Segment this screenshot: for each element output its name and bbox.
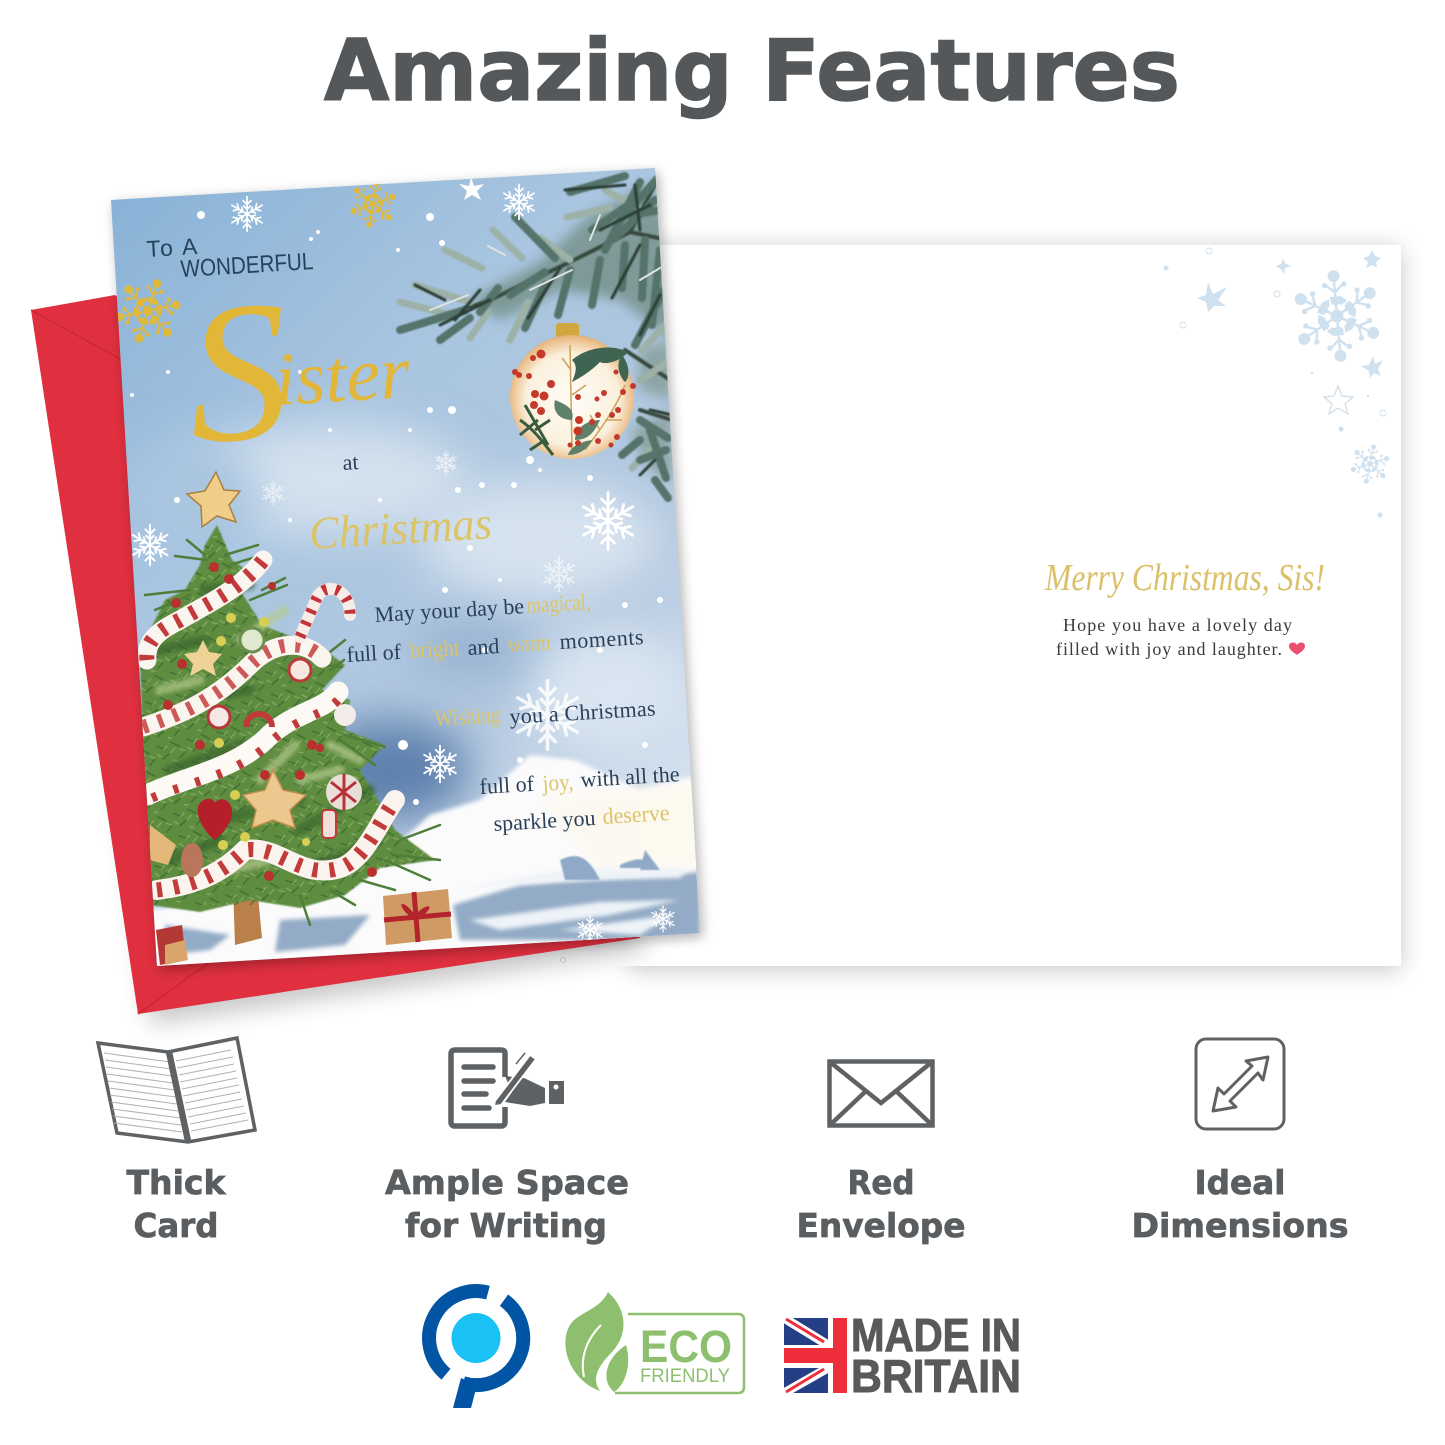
label: ample space for writing: for Writing: [405, 1206, 607, 1245]
card front wording: at: [342, 449, 359, 475]
panel: card front: [100, 160, 710, 980]
label: red envelope: Red: [848, 1163, 914, 1202]
made in britain text: [851, 1309, 1021, 1402]
garlands: [143, 560, 395, 890]
icon: red envelope: [830, 1062, 932, 1126]
panel: card inside: [560, 245, 1401, 970]
icon: thick card: [98, 1038, 255, 1142]
pine branches: [400, 175, 672, 498]
label: thick card: Card: [134, 1206, 218, 1245]
verse: with all the: [580, 761, 680, 792]
inside greeting heading: Merry Christmas, Sis!: [1044, 557, 1325, 599]
Christmas script: Christmas: [308, 497, 493, 559]
label: red envelope: [796, 1163, 966, 1245]
Sister script: ister: [272, 330, 412, 422]
made in britain text: MADE IN: [851, 1309, 1021, 1361]
verse: May your day be: [374, 593, 525, 627]
label: thick card: [126, 1163, 227, 1245]
label: ideal dimensions: Ideal: [1194, 1163, 1286, 1202]
label: red envelope: Envelope: [796, 1206, 966, 1245]
inside message: [1056, 615, 1305, 659]
verse: deserve: [602, 800, 670, 829]
Sister script: S: [182, 259, 294, 486]
label: ample space for writing: Ample Space: [385, 1163, 629, 1202]
verse: magical,: [526, 589, 591, 618]
verse: full of: [479, 771, 535, 799]
icon: eco friendly badge: ECO: [640, 1321, 732, 1372]
icon: blue certification logo: [429, 1291, 523, 1408]
verse: [346, 589, 680, 836]
tree sprays: [145, 540, 440, 925]
verse: Wishing: [434, 702, 502, 731]
label: ample space for writing: [385, 1163, 629, 1245]
icon: eco friendly badge: FRIENDLY: [640, 1366, 730, 1387]
panel: red envelope: [31, 295, 650, 1024]
verse: bright: [409, 635, 461, 663]
icon: inside snowflakes and stars: [560, 248, 1395, 962]
made in britain text: BRITAIN: [851, 1350, 1021, 1402]
card front wording: [146, 233, 680, 836]
icon: eco friendly badge: [565, 1292, 744, 1393]
verse: moments: [559, 624, 644, 654]
verse: and: [467, 633, 500, 660]
tree: [140, 525, 440, 945]
icon: ideal dimensions: [1196, 1039, 1284, 1129]
candy cane: [300, 589, 350, 637]
tree star topper: [187, 472, 240, 527]
label: ideal dimensions: [1132, 1163, 1348, 1245]
snow ground: [140, 755, 700, 980]
verse: warm: [507, 629, 551, 657]
verse: you a Christmas: [509, 695, 656, 729]
label: ideal dimensions: Dimensions: [1132, 1206, 1348, 1245]
verse: sparkle you: [493, 805, 596, 836]
icon: union flag: [784, 1318, 847, 1393]
card front wording: To A: [146, 233, 200, 262]
tree ornaments: [150, 562, 377, 881]
label: thick card: Thick: [126, 1163, 227, 1202]
verse: full of: [346, 639, 402, 667]
card front wording: WONDERFUL: [180, 248, 314, 283]
inside message: filled with joy and laughter.: [1056, 639, 1282, 659]
title: Amazing Features: [324, 22, 1180, 121]
bauble ornament: [510, 323, 636, 459]
inside message: Hope you have a lovely day: [1063, 615, 1292, 635]
snowflakes: [130, 177, 676, 944]
gift box: [156, 889, 452, 965]
icon: ample writing space: [451, 1050, 564, 1126]
verse: joy,: [541, 769, 574, 796]
